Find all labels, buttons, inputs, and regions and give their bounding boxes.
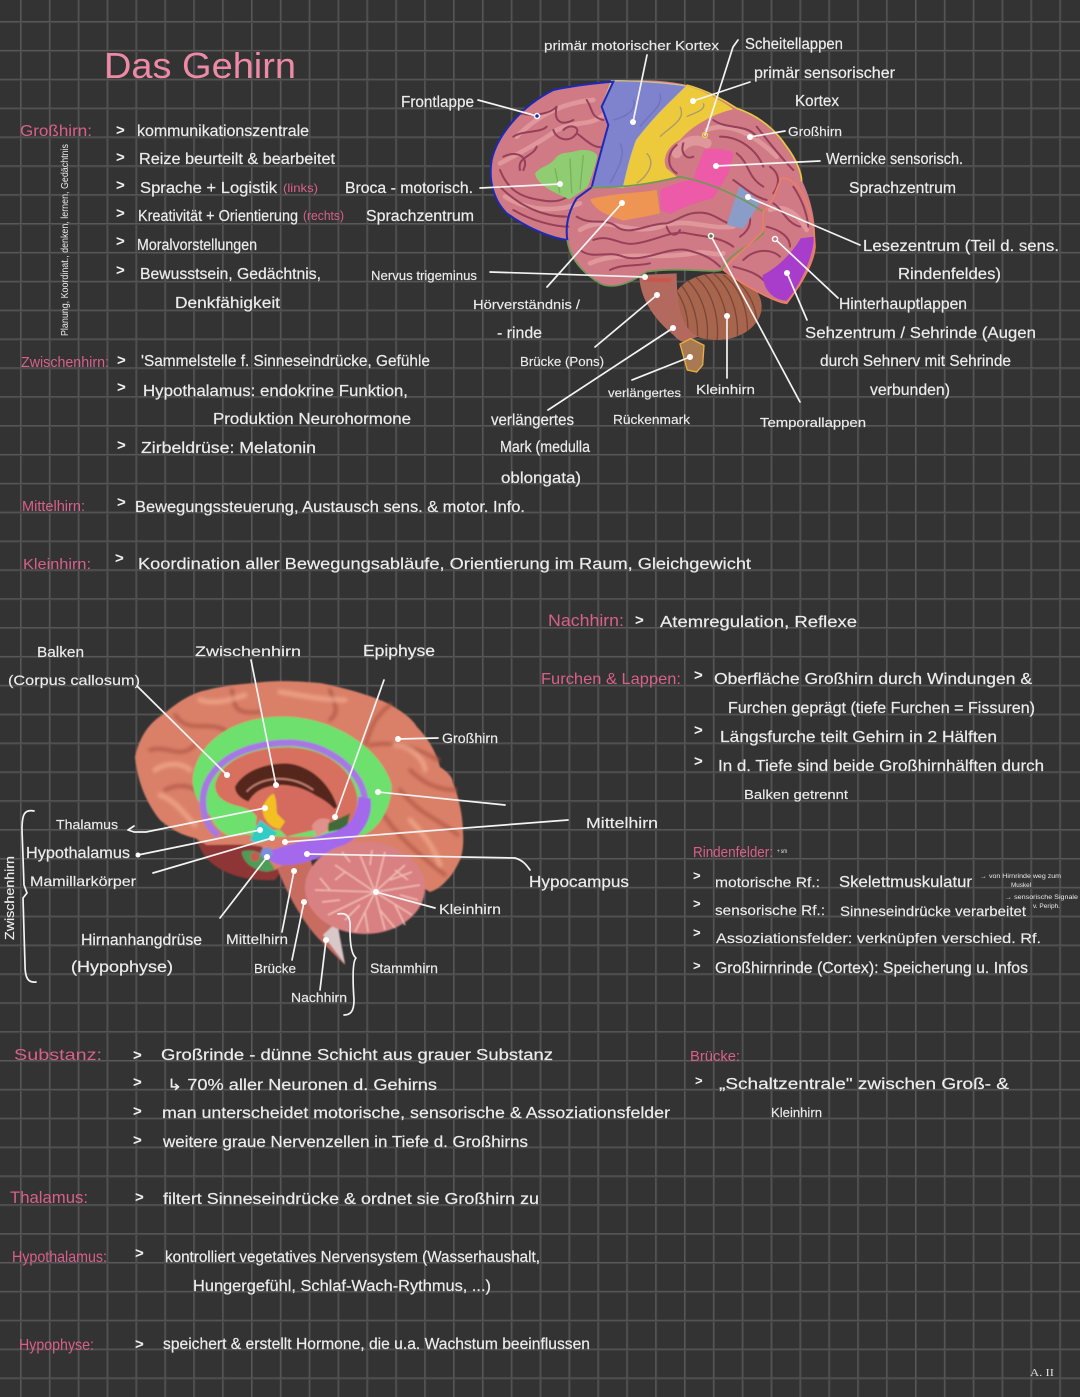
- purple fornix ring: [203, 743, 365, 835]
- labels: lateral brain: Brücke (Pons): [520, 354, 604, 369]
- labels: medial brain: Mamillarkörper: [30, 873, 136, 889]
- lower green patch left: [210, 806, 257, 837]
- brainstem: [639, 273, 698, 342]
- labels: lateral brain: Broca - motorisch.: [345, 180, 473, 197]
- panel: Rindenfelder notes: >: [693, 868, 701, 883]
- author mark: A. II: [1030, 1367, 1054, 1379]
- labels: lateral brain: Sehzentrum / Sehrinde (Augen: [805, 325, 1036, 342]
- panel: Rindenfelder notes: Rindenfelder:: [693, 844, 773, 861]
- bullet list: >: [116, 205, 125, 222]
- labels: medial brain: Hirnanhangdrüse: [81, 932, 202, 949]
- panel: Thalamus note: >: [135, 1189, 144, 1206]
- green limbic band: [193, 717, 392, 837]
- bullet list: (links): [283, 181, 318, 195]
- labels: medial brain: Hypothalamus: [26, 845, 130, 862]
- panel: Rindenfelder notes: Sinneseindrücke verarbeitet: [840, 903, 1026, 919]
- cerebellum: [672, 273, 762, 343]
- bullet list: Bewusstsein, Gedächtnis,: [140, 266, 321, 283]
- illustration: medial brain anatomy: [135, 681, 463, 965]
- panel: Furchen und Lappen notes: In d. Tiefe sind beide Großhirnhälften durch: [718, 758, 1044, 775]
- labels: medial brain: Kleinhirn: [439, 901, 501, 917]
- bullet list: Zirbeldrüse: Melatonin: [141, 440, 316, 457]
- inner salmon region: [215, 747, 357, 830]
- motor cortex region: [592, 81, 687, 187]
- labels: lateral brain: Wernicke sensorisch.: [826, 151, 963, 168]
- labels: lateral brain: Sprachzentrum: [849, 180, 956, 197]
- dark green gap: [328, 813, 350, 832]
- panel: Nachhirn note: >: [635, 612, 644, 629]
- labels: medial brain: Hypocampus: [529, 874, 629, 891]
- Broca folds: [555, 155, 583, 193]
- panel: Furchen und Lappen notes: Oberfläche Großhirn durch Windungen &: [714, 671, 1033, 688]
- labels: lateral brain: [345, 36, 1059, 487]
- diagram: medial brain section: [2, 643, 658, 1015]
- labels: medial brain: Großhirn: [442, 730, 498, 746]
- bullet list: Reize beurteilt & bearbeitet: [139, 151, 336, 168]
- panel: Mittelhirn note: Mittelhirn:: [22, 498, 85, 515]
- leader lines and dots: [478, 40, 860, 410]
- bullet list: >: [116, 149, 125, 166]
- bullet list: (rechts): [303, 208, 344, 223]
- panel: Substanz notes: man unterscheidet motorische, sensorische & Assoziationsfelder: [162, 1105, 670, 1122]
- bullet list: Hypothalamus: endokrine Funktion,: [143, 383, 408, 400]
- corpus highlight: [247, 779, 313, 792]
- labels: medial brain: [2, 643, 658, 1005]
- brace: Zwischenhirn: [22, 811, 36, 982]
- labels: lateral brain: Rindenfeldes): [898, 266, 1001, 283]
- labels: lateral brain: Nervus trigeminus: [371, 268, 477, 283]
- midbrain bulge: [312, 818, 330, 837]
- panel: Rindenfelder notes: >: [693, 958, 701, 973]
- dark lower region: [197, 825, 290, 880]
- panel: Rindenfelder notes: + sm: [777, 849, 787, 855]
- panel: Hypothalamus note: Hypothalamus:: [12, 1249, 107, 1266]
- panel: Hypophyse note: Hypophyse:: [19, 1337, 94, 1354]
- cerebellum: [305, 842, 425, 934]
- bullet list: Moralvorstellungen: [137, 237, 257, 254]
- panel: Substanz notes: >: [133, 1047, 142, 1064]
- labels: lateral brain: Hinterhauptlappen: [839, 296, 967, 313]
- heading: Großhirn: Großhirn:: [20, 123, 92, 140]
- panel: Brücke notes: Kleinhirn: [771, 1105, 822, 1120]
- labels: medial brain: Stammhirn: [370, 960, 438, 976]
- pituitary: [250, 852, 260, 861]
- labels: medial brain: Brücke: [254, 961, 296, 976]
- labels: lateral brain: oblongata): [501, 470, 581, 487]
- panel: Hypothalamus note: Hungergefühl, Schlaf-Wach-Rythmus, ...): [193, 1278, 491, 1295]
- lower dark red: [200, 845, 275, 879]
- panel: Substanz notes: Substanz:: [14, 1047, 102, 1064]
- panel: Hypophyse note: speichert & erstellt Hormone, die u.a. Wachstum beeinflussen: [163, 1336, 590, 1353]
- bullet list: >: [117, 352, 126, 369]
- motor and sensory folds: [610, 93, 704, 183]
- panel: Brücke notes: [690, 1048, 1010, 1120]
- brace: Stammhirn: [338, 914, 356, 1015]
- panel: Rindenfelder notes: >: [693, 896, 701, 911]
- panel: Brücke notes: „Schaltzentrale" zwischen Groß- &: [719, 1076, 1010, 1093]
- cortex folds: [150, 690, 458, 875]
- panel: Substanz notes: Großrinde - dünne Schicht aus grauer Substanz: [161, 1047, 553, 1064]
- labels: lateral brain: - rinde: [497, 325, 542, 342]
- bullet list: Kreativität + Orientierung: [138, 208, 298, 225]
- leader lines and dots: [128, 660, 568, 990]
- panel: Thalamus note: filtert Sinneseindrücke & ordnet sie Großhirn zu: [163, 1191, 539, 1208]
- medulla: [680, 339, 704, 372]
- panel: Rindenfelder notes: motorische Rf.:: [715, 874, 820, 890]
- diagram: lateral brain: [345, 36, 1059, 487]
- labels: medial brain: Zwischenhirn: [195, 643, 301, 659]
- panel: Hypothalamus note: kontrolliert vegetatives Nervensystem (Wasserhaushalt,: [165, 1249, 540, 1266]
- Wernicke area: [660, 149, 734, 214]
- panel: Thalamus note: [10, 1188, 539, 1208]
- bullet list: [117, 352, 430, 457]
- labels: medial brain: Mittelhirn: [586, 815, 658, 832]
- cortex: [135, 681, 463, 892]
- panel: Kleinhirn note: Kleinhirn:: [23, 556, 91, 573]
- red stripe: [643, 277, 672, 283]
- dark corpus: [235, 763, 337, 812]
- bullet list: kommunikationszentrale: [137, 123, 309, 140]
- reading center: [727, 186, 761, 229]
- panel: Mittelhirn note: [22, 494, 525, 516]
- bullet list: [116, 122, 344, 312]
- temporal lobe outline: [567, 177, 763, 286]
- panel: Rindenfelder notes: sensorische Rf.:: [715, 902, 825, 918]
- purple hippocampus: [267, 797, 371, 865]
- vertical note: Planung, Koordinat., denken, lernen, Gedächtnis: [60, 144, 71, 336]
- gyri: [500, 100, 808, 280]
- labels: lateral brain: verlängertes: [491, 412, 574, 429]
- bullet list: >: [116, 122, 125, 139]
- labels: medial brain: (Corpus callosum): [8, 672, 140, 688]
- bullet list: Denkfähigkeit: [175, 295, 281, 312]
- panel: Kleinhirn note: >: [115, 550, 124, 567]
- panel: Hypothalamus note: [12, 1245, 540, 1295]
- auditory cortex: [590, 190, 660, 221]
- cyan hypothalamus: [250, 820, 277, 843]
- panel: Hypophyse note: >: [135, 1336, 144, 1353]
- panel: Rindenfelder notes: Assoziationsfelder: verknüpfen verschied. Rf.: [716, 930, 1041, 946]
- panel: Mittelhirn note: >: [117, 494, 126, 511]
- labels: lateral brain: Großhirn: [788, 124, 842, 139]
- panel: Substanz notes: >: [133, 1074, 142, 1091]
- panel: Furchen und Lappen notes: Balken getrennt: [744, 787, 848, 802]
- visual cortex: [763, 237, 814, 301]
- bullet list: Sprache + Logistik: [140, 180, 277, 197]
- panel: Rindenfelder notes: → sensorische Signale: [1005, 895, 1079, 901]
- panel: Nachhirn note: [548, 611, 857, 631]
- labels: lateral brain: verbunden): [870, 382, 950, 399]
- panel: Kleinhirn note: [23, 550, 752, 573]
- labels: lateral brain: primär sensorischer: [754, 65, 895, 82]
- labels: lateral brain: Mark (medulla: [500, 439, 590, 456]
- panel: Furchen und Lappen notes: >: [694, 667, 703, 684]
- labels: lateral brain: Lesezentrum (Teil d. sens.: [863, 238, 1059, 255]
- panel: Mittelhirn note: Bewegungssteuerung, Austausch sens. & motor. Info.: [135, 499, 525, 516]
- panel: Brücke notes: >: [695, 1073, 703, 1088]
- sensory cortex region: [623, 86, 733, 187]
- labels: lateral brain: Kleinhirn: [696, 382, 755, 397]
- panel: Rindenfelder notes: Großhirnrinde (Cortex): Speicherung u. Infos: [715, 960, 1028, 977]
- brainstem: [275, 855, 345, 965]
- panel: Furchen und Lappen notes: [541, 667, 1044, 802]
- panel: Furchen und Lappen notes: >: [694, 753, 703, 770]
- labels: medial brain: Mittelhirn: [226, 931, 288, 947]
- occipital lobe outline: [723, 178, 815, 303]
- heading: Zwischenhirn: Zwischenhirn:: [21, 354, 109, 371]
- yellow thalamus: [262, 794, 285, 829]
- panel: Substanz notes: weitere graue Nervenzellen in Tiefe d. Großhirns: [162, 1134, 528, 1151]
- labels: lateral brain: durch Sehnerv mit Sehrinde: [820, 353, 1011, 370]
- panel: Substanz notes: >: [133, 1132, 142, 1149]
- panel: Rindenfelder notes: >: [693, 925, 701, 940]
- labels: medial brain: Nachhirn: [291, 990, 347, 1005]
- blue mammillary: [261, 847, 273, 859]
- bullet list: >: [116, 262, 125, 279]
- cerebrum base: [491, 80, 815, 303]
- bullet list: >: [116, 233, 125, 250]
- labels: medial brain: Thalamus: [56, 817, 119, 832]
- labels: lateral brain: Frontlappe: [401, 94, 474, 111]
- bullet list: >: [117, 379, 126, 396]
- panel: Rindenfelder notes: Skelettmuskulatur: [839, 874, 972, 891]
- stem tip: [323, 922, 345, 964]
- panel: Substanz notes: [14, 1047, 670, 1151]
- frontal lobe outline: [491, 82, 613, 240]
- lower green patch: [242, 851, 275, 872]
- bullet list: Produktion Neurohormone: [213, 411, 411, 428]
- labels: lateral brain: Scheitellappen: [745, 36, 843, 53]
- panel: Furchen und Lappen notes: >: [694, 722, 703, 739]
- labels: medial brain: Zwischenhirn: [2, 856, 17, 940]
- panel: Thalamus note: Thalamus:: [10, 1188, 88, 1207]
- panel: Zwischenhirn notes: [21, 352, 430, 457]
- labels: lateral brain: Kortex: [795, 93, 839, 110]
- labels: medial brain: Epiphyse: [363, 643, 435, 660]
- labels: lateral brain: Hörverständnis /: [473, 297, 580, 312]
- panel: Furchen und Lappen notes: Furchen & Lappen:: [541, 671, 681, 688]
- labels: medial brain: (Hypophyse): [71, 959, 173, 976]
- Broca area: [535, 150, 597, 199]
- panel: Kleinhirn note: Koordination aller Bewegungsabläufe, Orientierung im Raum, Gleichgewicht: [138, 556, 752, 573]
- bullet list: >: [117, 437, 126, 454]
- panel: Substanz notes: >: [133, 1103, 142, 1120]
- panel: Brücke notes: Brücke:: [690, 1048, 740, 1065]
- panel: Rindenfelder notes: v. Periph.: [1033, 904, 1060, 910]
- illustration: lateral brain anatomy: [491, 80, 815, 372]
- panel: Rindenfelder notes: → von Hirnrinde weg zum: [980, 874, 1061, 880]
- title: Das Gehirn: [104, 45, 296, 86]
- labels: lateral brain: verlängertes: [608, 386, 681, 400]
- panel: Rindenfelder notes: Muskel: [1011, 883, 1031, 889]
- panel: Großhirn notes: [20, 122, 344, 336]
- panel: Nachhirn note: Nachhirn:: [548, 611, 624, 630]
- panel: Hypothalamus note: >: [135, 1245, 144, 1262]
- labels: medial brain: Balken: [37, 644, 84, 661]
- bullet list: >: [116, 177, 125, 194]
- limbic and core structures, drawn on the zoomed coordinate frame: [193, 717, 392, 879]
- panel: Furchen und Lappen notes: Furchen geprägt (tiefe Furchen = Fissuren): [728, 700, 1035, 717]
- labels: lateral brain: Rückenmark: [613, 412, 691, 427]
- labels: lateral brain: Sprachzentrum: [366, 208, 474, 225]
- panel: Furchen und Lappen notes: Längsfurche teilt Gehirn in 2 Hälften: [720, 729, 997, 746]
- parietal lobe outline: [687, 85, 802, 182]
- labels: lateral brain: primär motorischer Kortex: [544, 38, 720, 53]
- panel: Nachhirn note: Atemregulation, Reflexe: [660, 614, 857, 631]
- labels: lateral brain: Temporallappen: [760, 415, 866, 430]
- panel: Substanz notes: ↳ 70% aller Neuronen d. Gehirns: [167, 1077, 437, 1094]
- bullet list: 'Sammelstelle f. Sinneseindrücke, Gefühle: [141, 353, 430, 370]
- central body: [273, 787, 337, 837]
- panel: Rindenfelder notes: [693, 844, 1079, 977]
